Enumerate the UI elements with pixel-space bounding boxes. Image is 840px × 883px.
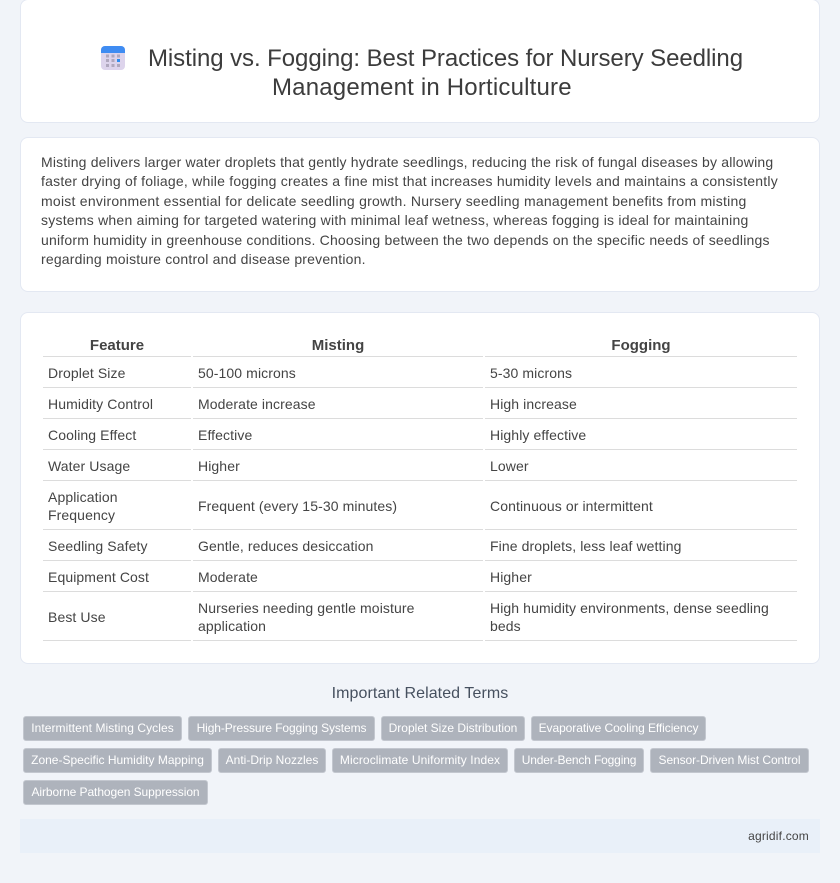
footer bar — [20, 819, 820, 853]
table rows: Application — [48, 489, 118, 505]
table rows — [43, 356, 797, 641]
heading: related terms: Important Related Terms — [332, 685, 508, 702]
table rows: Continuous or intermittent — [490, 498, 653, 514]
related term tags: Anti-Drip Nozzles — [226, 753, 318, 767]
table rows: Cooling Effect — [48, 427, 136, 443]
table rows: Humidity Control — [48, 396, 153, 412]
table rows: Highly effective — [490, 427, 586, 443]
table rows: High humidity environments, dense seedling — [490, 600, 769, 616]
table rows: Nurseries needing gentle moisture — [198, 600, 415, 616]
table rows: High increase — [490, 396, 577, 412]
table rows: Frequent (every 15-30 minutes) — [198, 498, 397, 514]
title: Misting vs. Fogging: Best Practices for Nursery Seedling — [148, 45, 743, 72]
text block: description: Misting delivers larger water droplets that gently hydrate seedlings, reducing the risk of fungal diseases by allowing — [41, 154, 773, 170]
related term tags: Under-Bench Fogging — [522, 753, 636, 767]
table rows: Moderate — [198, 569, 258, 585]
title: Management in Horticulture — [272, 74, 572, 101]
table rows: Higher — [490, 569, 532, 585]
text block: description: systems when aiming for targeted watering with minimal leaf wetness, whereas fogging is ideal for maintaining — [41, 212, 749, 228]
panel: title header — [20, 0, 820, 123]
text block: description: regarding moisture control and disease prevention. — [41, 251, 366, 267]
table rows: Higher — [198, 458, 240, 474]
related term tags: Airborne Pathogen Suppression — [31, 785, 200, 799]
title — [148, 45, 743, 101]
table header: Misting — [312, 337, 364, 354]
table rows: 50-100 microns — [198, 365, 296, 381]
table rows: Gentle, reduces desiccation — [198, 538, 373, 554]
text block: description: moist environment essential for delicate seedling growth. Nursery seedling management benefits from misting — [41, 193, 747, 209]
table rows: beds — [490, 618, 521, 634]
related term tags: Intermittent Misting Cycles — [31, 721, 174, 735]
text block: description — [41, 154, 778, 267]
table rows: 5-30 microns — [490, 365, 572, 381]
related term tags: High-Pressure Fogging Systems — [197, 721, 366, 735]
panel: description — [20, 137, 820, 292]
table rows: Best Use — [48, 609, 106, 625]
panel: comparison table — [20, 312, 820, 664]
table header — [90, 337, 671, 354]
table header: Fogging — [611, 337, 671, 354]
related term tags: Microclimate Uniformity Index — [340, 753, 500, 767]
table rows: Seedling Safety — [48, 538, 148, 554]
related term tags — [23, 716, 809, 805]
table rows: Frequency — [48, 507, 115, 523]
table rows: Lower — [490, 458, 529, 474]
table rows: Fine droplets, less leaf wetting — [490, 538, 682, 554]
text block: description: faster drying of foliage, while fogging creates a fine mist that increases humidity levels and maintains a consistently — [41, 173, 778, 189]
table rows: Water Usage — [48, 458, 130, 474]
table rows: application — [198, 618, 266, 634]
icon: calendar — [101, 46, 125, 70]
related term tags: Sensor-Driven Mist Control — [659, 753, 800, 767]
table header: Feature — [90, 337, 144, 354]
related term tags: Evaporative Cooling Efficiency — [539, 721, 698, 735]
text block: description: uniform humidity in greenhouse conditions. Choosing between the two depends on the specific needs of seedlings — [41, 232, 770, 248]
table rows: Effective — [198, 427, 252, 443]
related term tags: Zone-Specific Humidity Mapping — [31, 753, 204, 767]
table rows: Moderate increase — [198, 396, 316, 412]
footer site name: agridif.com — [748, 829, 809, 843]
table rows: Droplet Size — [48, 365, 125, 381]
table rows: Equipment Cost — [48, 569, 149, 585]
related term tags: Droplet Size Distribution — [389, 721, 517, 735]
